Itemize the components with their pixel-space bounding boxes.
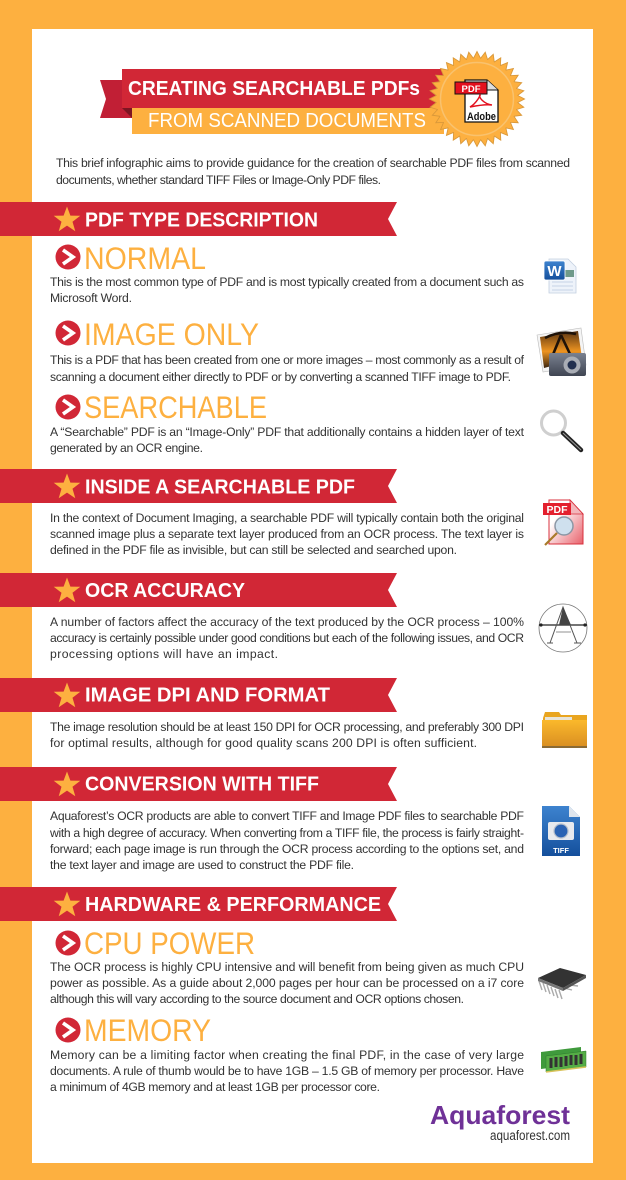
subsection: Normal [50,240,524,305]
subsection: Normal: NORMAL [84,240,206,276]
section heading: Conversion with TIFF [0,767,397,801]
text: conversion with TIFF: Aquaforest’s OCR products are able to convert TIFF and Image PDF files to searchable PDF [50,809,524,823]
section heading: Image DPI and format: IMAGE DPI AND FORMAT [85,684,330,706]
title bar [122,69,444,108]
subsection: Image only: This is a PDF that has been created from one or more images – most commonly as a result of [50,353,525,367]
text: image DPI and format: The image resolution should be at least 150 DPI for OCR processing, and preferably 300 DPI [50,720,524,734]
text: OCR accuracy [50,615,524,661]
logo: Aquaforest [430,1100,570,1143]
subtitle bar [132,108,444,134]
title banner [100,50,526,148]
text: image DPI and format [50,720,524,750]
section heading: Hardware and performance: HARDWARE & PERFORMANCE [85,893,381,916]
subsection: Image only [50,316,525,384]
icon: Adobe PDF document: PDF [462,84,481,95]
text: OCR accuracy: A number of factors affect the accuracy of the text produced by the OCR process – 100% [50,615,524,629]
icon: Adobe PDF document: Adobe [467,111,496,123]
subsection: Image only: scanning a document either directly to PDF or by converting a scanned TIFF image to PDF. [50,370,511,384]
text: OCR accuracy: accuracy is certainly possible under good conditions but each of the following issues, and OCR [50,631,524,645]
text: OCR accuracy: processing options will have an impact. [50,647,278,661]
section heading: PDF type description: PDF TYPE DESCRIPTION [85,208,318,232]
section heading: Inside a searchable PDF: INSIDE A SEARCHABLE PDF [85,476,355,498]
icon: Word document: W [547,263,562,280]
subsection: Memory: documents. A rule of thumb would be to have 1GB – 1.5 GB of memory per processor. Have [50,1064,524,1078]
text: inside a searchable PDF: In the context of Document Imaging, a searchable PDF will typically contain both the original [50,511,524,525]
text: conversion with TIFF: with a high degree of accuracy. When converting from a TIFF file, the process is fairly straight- [49,826,524,840]
icon: typeface A in circle [539,604,587,652]
subsection: Normal: Microsoft Word. [50,291,132,305]
text: inside a searchable PDF: defined in the PDF file as invisible, but can still be selected and searched upon. [50,543,457,557]
section heading: Hardware and performance [0,887,397,921]
logo: Aquaforest: aquaforest.com [490,1128,570,1143]
subsection: Memory: MEMORY [84,1012,211,1048]
section heading: OCR accuracy [0,573,397,607]
icon: Word document [544,259,576,293]
ribbon tail [100,80,132,118]
section heading: OCR accuracy: OCR ACCURACY [85,579,245,602]
subsection: Searchable: A “Searchable” PDF is an “Image-Only” PDF that additionally contains a hidden layer of text [50,425,525,439]
subsection: Searchable: SEARCHABLE [84,389,267,425]
subsection: CPU power: although this will vary according to the source document and OCR options chosen. [50,992,464,1006]
icon: RAM modules [541,1047,586,1072]
text: conversion with TIFF: the text layer and image are used to construct the PDF file. [50,858,354,872]
seal [428,50,526,148]
text: conversion with TIFF [49,809,524,872]
text: conversion with TIFF: forward; each page image is run through the OCR process according to the options set, and [50,842,524,856]
subsection: CPU power: The OCR process is highly CPU intensive and will benefit from being given as much CPU [50,960,524,974]
section heading: Image DPI and format [0,678,397,712]
subsection: Image only: IMAGE ONLY [84,316,259,352]
subsection: Searchable [50,389,525,455]
icon: photo and camera [537,328,586,376]
icon: CPU chip [538,968,586,999]
text: image DPI and format: for optimal results, although for good quality scans 200 DPI is often sufficient. [50,736,477,750]
logo: Aquaforest: Aquaforest [430,1100,570,1130]
text: inside a searchable PDF: scanned image plus a separate text layer produced from an OCR process. The text layer is [50,527,524,541]
subsection: Memory [50,1012,524,1094]
intro text: documents, whether standard TIFF Files or Image-Only PDF files. [56,173,381,187]
subsection: CPU power: power as possible. As a guide about 2,000 pages per hour can be processed on a i7 core [50,976,524,990]
icon: PDF with magnifier: PDF [546,504,568,516]
subtitle text: FROM SCANNED DOCUMENTS [148,109,426,132]
subsection: Memory: a minimum of 4GB memory and at least 1GB per processor core. [50,1080,380,1094]
subsection: Memory: Memory can be a limiting factor when creating the final PDF, in the case of very large [50,1048,524,1062]
subsection: CPU power [50,925,524,1006]
icon: Adobe PDF document [455,80,498,123]
icon: PDF with magnifier [543,500,583,545]
icon: folder [542,712,587,748]
subsection: CPU power: CPU POWER [84,925,255,961]
ribbon fold [122,108,132,118]
subsection: Normal: This is the most common type of PDF and is most typically created from a document such as [50,275,524,289]
icon: TIFF file: TIFF [553,846,569,855]
section heading: Conversion with TIFF: CONVERSION WITH TIFF [85,772,319,796]
icon: magnifying glass [542,411,581,450]
subsection: Searchable: generated by an OCR engine. [50,441,203,455]
icon: TIFF file [542,806,580,856]
intro text: This brief infographic aims to provide guidance for the creation of searchable PDF files from scanned [56,156,570,170]
text: inside a searchable PDF [50,511,524,557]
intro text [56,156,570,187]
title text: CREATING SEARCHABLE PDFs [128,77,420,100]
section heading: Inside a searchable PDF [0,469,397,503]
section heading: PDF type description [0,202,397,236]
